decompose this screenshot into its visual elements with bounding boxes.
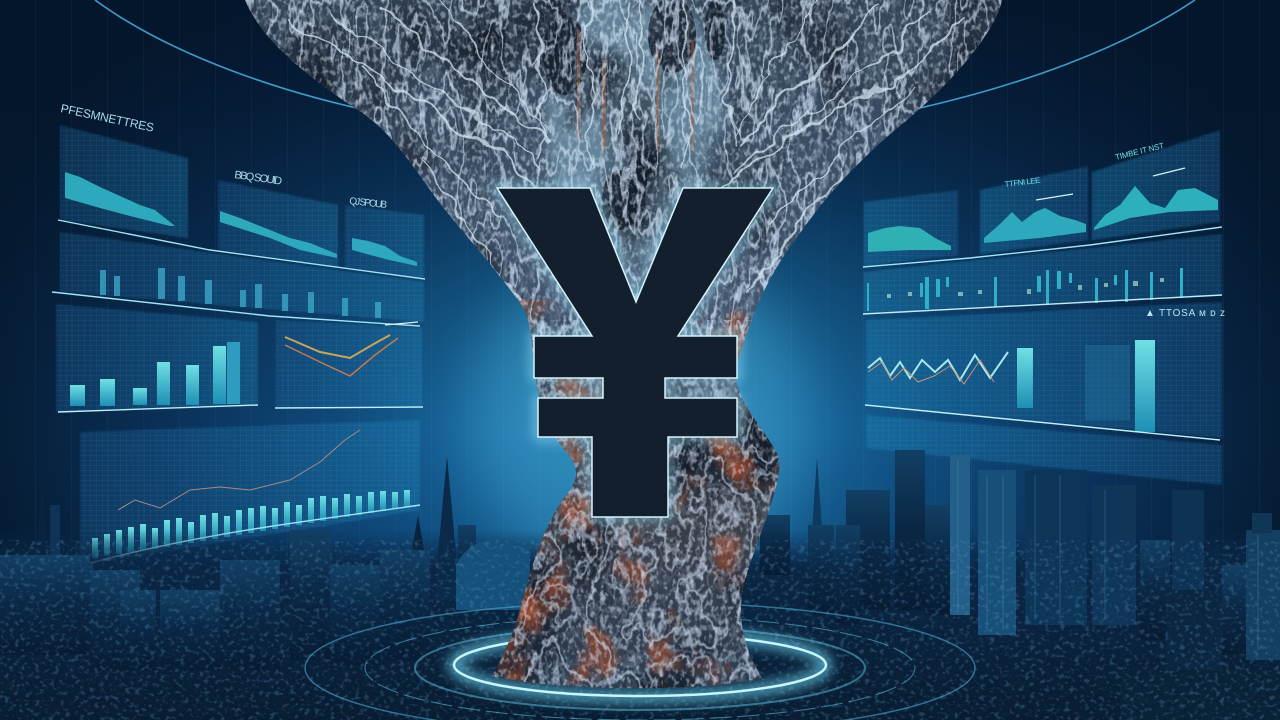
panel: right dashboard wall xyxy=(863,130,1225,485)
texture: city windows and streets xyxy=(0,540,1280,720)
panel: top left trend chart xyxy=(59,101,188,238)
ground: dark city plane xyxy=(0,530,1280,720)
panel: left dashboard wall xyxy=(52,101,425,566)
divider: right upper shelf line xyxy=(863,227,1222,267)
divider: third shelf line right xyxy=(275,407,423,408)
panel: bottom left combined chart xyxy=(80,420,420,566)
vortex: dark cavities xyxy=(543,0,725,230)
divider: third shelf line left xyxy=(58,405,258,412)
arc: top right light ring xyxy=(920,0,1195,108)
heading: middle chart label: TTFNI LEE xyxy=(1004,176,1041,189)
vortex: swirling data column xyxy=(230,0,1020,700)
heading: large chart label: TIMBE IT NST xyxy=(1114,141,1165,162)
divider: second shelf line xyxy=(52,292,420,326)
divider: first shelf line xyxy=(58,220,425,279)
rings: holographic platform xyxy=(305,602,975,720)
divider: right middle shelf line xyxy=(863,295,1222,314)
heading: middle panel label: BBQ SOUID xyxy=(234,169,283,188)
panel: right area chart small xyxy=(864,190,958,266)
cityscape: right skyline xyxy=(760,450,1280,720)
panel: top right trend chart xyxy=(345,196,424,278)
heading: left panel label: PFESMNETTRES xyxy=(59,101,155,135)
panel: right lower data table xyxy=(866,415,1222,485)
panel: right area chart large xyxy=(1092,130,1220,240)
panel: left bar chart xyxy=(56,304,258,412)
panel: left middle bar strip xyxy=(60,232,424,322)
vortex: flaring strands xyxy=(290,0,970,300)
panel: left line chart xyxy=(276,320,422,408)
heading: right panel label: QJ SPOUB xyxy=(349,196,388,211)
cityscape: left skyline xyxy=(0,456,530,670)
icon: yen symbol glow xyxy=(497,188,773,517)
panel: right line and bar charts xyxy=(866,302,1225,438)
icon: yen symbol xyxy=(497,188,773,517)
divider: right lower shelf line xyxy=(865,405,1220,440)
panel: top middle trend chart xyxy=(218,169,338,268)
divider: bottom curved shelf line xyxy=(80,505,420,566)
panel: right area chart middle xyxy=(980,166,1088,254)
heading: right chart label: ▲ TTOSA ᴍ ᴅ ᴢ xyxy=(1145,308,1225,319)
panel: right bar strip xyxy=(864,234,1222,313)
arc: top left light ring xyxy=(95,0,395,116)
